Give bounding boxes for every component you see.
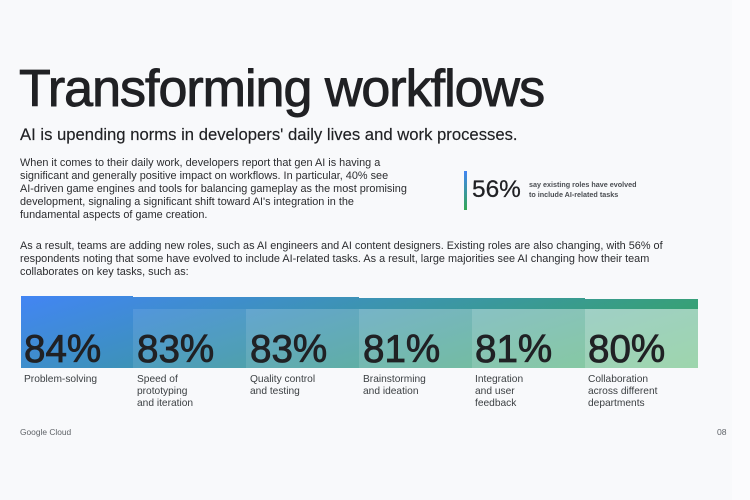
intro text block: AI-driven game engines and tools for balancing gameplay as the most promising (20, 183, 407, 195)
callout caption (529, 180, 636, 198)
callout: 56% stat (464, 171, 636, 210)
stat: brainstorming (363, 328, 440, 397)
chart: percentage bars (21, 296, 698, 368)
overlay panels (133, 309, 698, 368)
body text block: As a result, teams are adding new roles, such as AI engineers and AI content designers. Existing roles are also changing, with 56% of (20, 240, 663, 252)
page number: 08 (717, 427, 727, 437)
stat: speed of prototyping (137, 328, 214, 409)
stat: integration: Integration (475, 374, 523, 385)
stat: integration: and user (475, 386, 515, 397)
gradient band (21, 296, 698, 368)
body text block: collaborates on key tasks, such as: (20, 266, 189, 278)
right edge strip (732, 0, 750, 500)
subtitle: AI is upending norms in developers' daily lives and work processes. (20, 125, 518, 144)
intro text block: fundamental aspects of game creation. (20, 209, 207, 221)
intro text block: When it comes to their daily work, developers report that gen AI is having a (20, 157, 380, 169)
intro text block (20, 157, 407, 221)
stat: speed of prototyping: Speed of (137, 374, 178, 385)
stat: integration: feedback (475, 398, 516, 409)
stat: brainstorming: 81% (363, 328, 440, 371)
callout number: 56% (472, 176, 521, 203)
stat: problem-solving: Problem-solving (24, 374, 97, 385)
title: Transforming workflows (19, 60, 544, 118)
stat: collaboration (588, 328, 665, 409)
body text block (20, 240, 663, 278)
stat: problem-solving: 84% (24, 328, 101, 371)
stat: speed of prototyping: and iteration (137, 398, 193, 409)
intro text block: significant and generally positive impact on workflows. In particular, 40% see (20, 170, 388, 182)
stat: quality control: 83% (250, 328, 327, 371)
stat: speed of prototyping: prototyping (137, 386, 187, 397)
footer logo text: Google Cloud (20, 427, 71, 437)
stat: integration (475, 328, 552, 409)
stat: collaboration: departments (588, 398, 645, 409)
stat: collaboration: Collaboration (588, 374, 648, 385)
stat: brainstorming: Brainstorming (363, 374, 426, 385)
stat: speed of prototyping: 83% (137, 328, 214, 371)
callout caption: to include AI-related tasks (529, 190, 618, 198)
stat: collaboration: 80% (588, 328, 665, 371)
callout caption: say existing roles have evolved (529, 180, 636, 189)
stat: quality control (250, 328, 327, 397)
intro text block: development, signaling a significant shift toward AI's integration in the (20, 196, 354, 208)
stat: collaboration: across different (588, 386, 657, 397)
stat: quality control: Quality control (250, 374, 315, 385)
body text block: respondents noting that some have evolved to include AI-related tasks. As a result, large majorities see AI changing how their team (20, 253, 649, 265)
callout accent bar (464, 171, 467, 210)
stat: quality control: and testing (250, 386, 300, 397)
stat: integration: 81% (475, 328, 552, 371)
stat: brainstorming: and ideation (363, 386, 419, 397)
